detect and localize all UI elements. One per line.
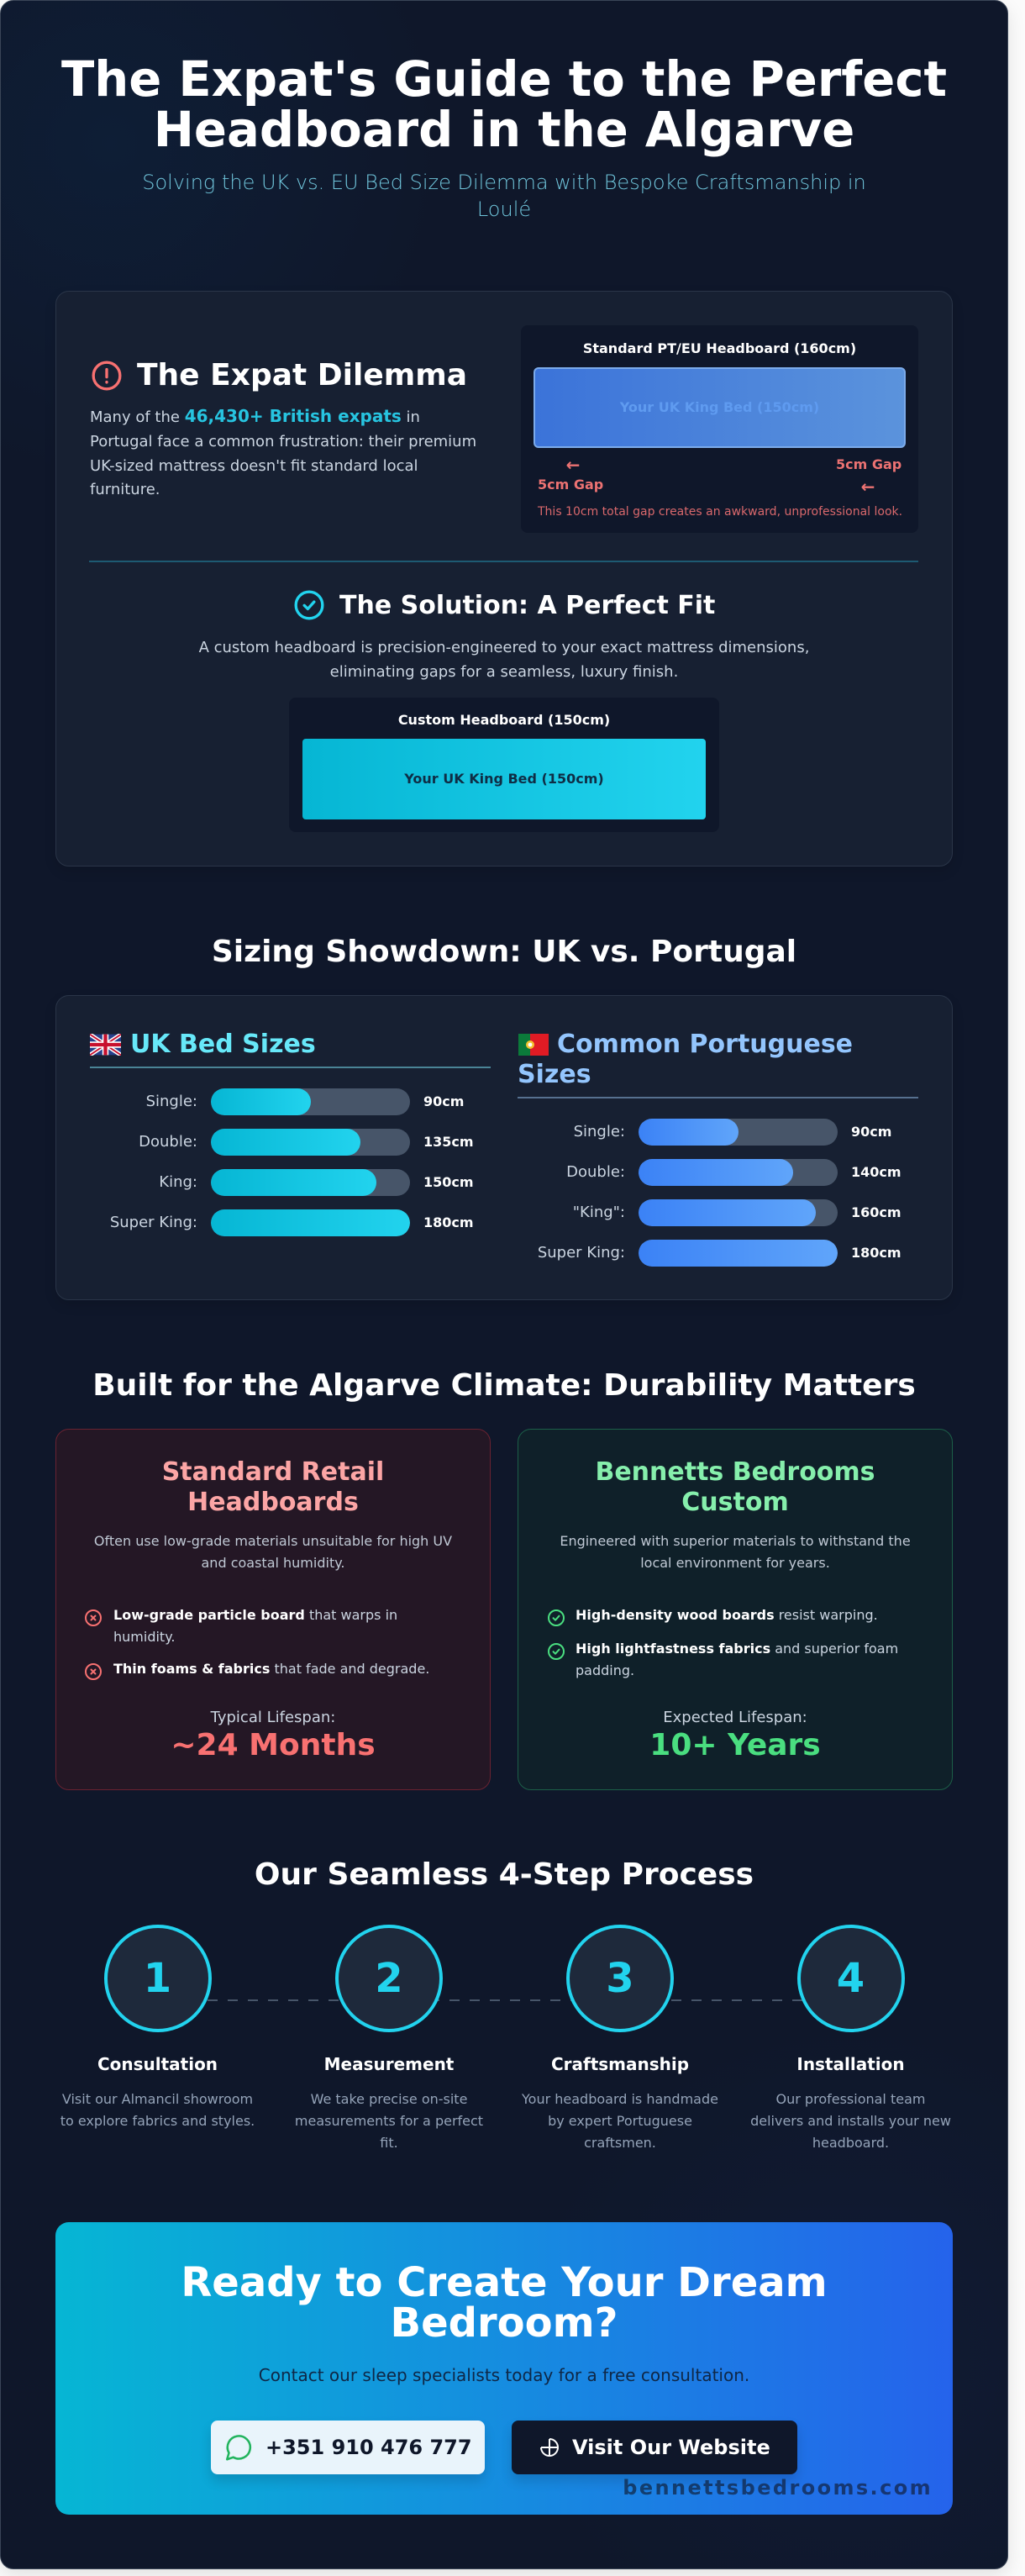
- panel: dilemma and solution: [55, 291, 953, 867]
- step description: [522, 2091, 718, 2151]
- heading: the expat dilemma: The Expat Dilemma: [137, 358, 467, 392]
- step number: 3: [606, 1955, 634, 2002]
- list item: Low-grade particle board that warps in: [113, 1607, 397, 1623]
- chart: UK sizes: [110, 1088, 474, 1236]
- chart: Portuguese sizes: [538, 1119, 901, 1267]
- list item: [576, 1641, 898, 1678]
- card description: Engineered with superior materials to withstand the: [560, 1533, 911, 1549]
- icon: alert circle: [92, 361, 121, 390]
- card description: local environment for years.: [640, 1555, 830, 1571]
- step description: We take precise on-site: [311, 2091, 467, 2107]
- text: solution description: [198, 639, 809, 681]
- list item: [113, 1607, 397, 1645]
- step description: headboard.: [812, 2135, 889, 2151]
- step description: Visit our Almancil showroom: [62, 2091, 253, 2107]
- card description: Often use low-grade materials unsuitable for high UV: [94, 1533, 452, 1549]
- step title: Craftsmanship: [551, 2054, 689, 2074]
- panel: Bennetts Bedrooms custom: [518, 1429, 953, 1790]
- title: [61, 51, 947, 158]
- infographic container: 150cm: [423, 1174, 474, 1190]
- step title: Consultation: [97, 2054, 218, 2074]
- subtitle: Loulé: [477, 198, 531, 221]
- card description: [94, 1533, 452, 1571]
- right gap label: 5cm Gap: [836, 456, 901, 472]
- divider: [89, 561, 918, 562]
- text: solution description: eliminating gaps for a seamless, luxury finish.: [330, 663, 678, 681]
- website label: Visit Our Website: [572, 2436, 770, 2459]
- card title: Headboards: [187, 1488, 359, 1517]
- list item: humidity.: [113, 1629, 175, 1645]
- step description: by expert Portuguese: [548, 2113, 692, 2129]
- button: phone: [211, 2421, 485, 2474]
- list item: Thin foams & fabrics that fade and degrade.: [113, 1661, 429, 1677]
- infographic container: 140cm: [851, 1164, 901, 1180]
- heading: common Portuguese sizes: Common Portuguese: [557, 1030, 853, 1059]
- title: The Expat's Guide to the Perfect: [61, 51, 947, 108]
- list item: High-density wood boards resist warping.: [576, 1607, 878, 1623]
- card description: [560, 1533, 911, 1571]
- heading: UK bed sizes: UK Bed Sizes: [130, 1030, 316, 1059]
- step description: craftsmen.: [584, 2135, 656, 2151]
- step 1: [60, 1925, 255, 2129]
- left gap arrow: ←: [566, 455, 580, 475]
- icon: UK flag: [90, 1034, 121, 1056]
- divider: [518, 1097, 918, 1098]
- step 3: [522, 1925, 718, 2151]
- step description: fit.: [380, 2135, 398, 2151]
- text: dilemma description: [90, 406, 476, 498]
- heading: the solution: The Solution: A Perfect Fit: [339, 591, 715, 620]
- infographic container: 90cm: [423, 1093, 464, 1109]
- title: Headboard in the Algarve: [154, 102, 854, 158]
- step title: Installation: [796, 2054, 905, 2074]
- step number: [335, 1925, 443, 2032]
- heading: durability: Built for the Algarve Climate: Durability Matters: [92, 1368, 916, 1403]
- CTA subtitle: Contact our sleep specialists today for a free consultation.: [259, 2365, 749, 2385]
- right gap arrow: ←: [861, 477, 875, 497]
- infographic container: 180cm: [851, 1245, 901, 1261]
- mattress bar: Your UK King Bed (150cm): [620, 399, 819, 415]
- subtitle: [142, 171, 866, 221]
- lifespan value: ~24 Months: [171, 1728, 376, 1762]
- lifespan label: Expected Lifespan:: [663, 1709, 807, 1726]
- step description: [750, 2091, 951, 2151]
- icon: Portugal flag: [518, 1034, 549, 1056]
- card title: Standard Retail: [162, 1457, 384, 1487]
- diagram: standard headboard gap: [521, 325, 918, 533]
- mattress bar: [302, 739, 706, 819]
- text: solution description: A custom headboard is precision-engineered to your exact mattress dimensions,: [199, 639, 809, 656]
- icon: cross: [85, 1609, 102, 1626]
- button: website: [512, 2421, 797, 2474]
- step number: 1: [144, 1955, 171, 2002]
- panel: sizing comparison: [55, 995, 953, 1300]
- panel: call to action: [55, 2222, 953, 2515]
- mattress bar: [534, 367, 906, 448]
- infographic container: 135cm: [423, 1134, 474, 1150]
- row: king: "King":: [573, 1204, 625, 1221]
- lifespan value: 10+ Years: [649, 1728, 821, 1762]
- text: dilemma description: furniture.: [90, 481, 160, 498]
- infographic container: 90cm: [851, 1124, 891, 1140]
- step 4: [750, 1925, 951, 2151]
- left gap label: 5cm Gap: [538, 477, 603, 493]
- lifespan label: Typical Lifespan:: [211, 1709, 335, 1726]
- CTA title: Bedroom?: [390, 2299, 618, 2347]
- step description: Our professional team: [776, 2091, 925, 2107]
- infographic container: 160cm: [851, 1204, 901, 1220]
- step description: to explore fabrics and styles.: [60, 2113, 255, 2129]
- step number: 4: [837, 1955, 865, 2002]
- website watermark: bennettsbedrooms.com: [623, 2476, 933, 2500]
- CTA title: Ready to Create Your Dream: [181, 2259, 828, 2306]
- list item: High lightfastness fabrics and superior foam: [576, 1641, 898, 1657]
- card description: and coastal humidity.: [202, 1555, 344, 1571]
- panel: standard retail headboards: [55, 1429, 491, 1790]
- mattress bar: Your UK King Bed (150cm): [404, 771, 604, 787]
- subtitle: Solving the UK vs. EU Bed Size Dilemma with Bespoke Craftsmanship in: [142, 171, 866, 194]
- step description: Your headboard is handmade: [522, 2091, 718, 2107]
- step 2: [295, 1925, 483, 2151]
- infographic container: 180cm: [423, 1214, 474, 1230]
- row: king: King:: [159, 1173, 197, 1191]
- list item: padding.: [576, 1662, 634, 1678]
- diagram: custom headboard: [289, 698, 719, 832]
- step number: [104, 1925, 212, 2032]
- heading: common Portuguese sizes: Sizes: [518, 1060, 591, 1089]
- step description: delivers and installs your new: [750, 2113, 951, 2129]
- card title: Bennetts Bedrooms: [595, 1457, 875, 1487]
- text: dilemma description: Portugal face a common frustration: their premium: [90, 433, 476, 450]
- card title: [162, 1457, 384, 1517]
- connector: dashed line: [208, 1999, 802, 2001]
- step number: [796, 1925, 904, 2032]
- step title: Measurement: [324, 2054, 454, 2074]
- step number: 2: [375, 1955, 403, 2002]
- row: super king: Super King:: [538, 1244, 625, 1262]
- row: double: Double:: [566, 1163, 625, 1181]
- icon: cross: [85, 1663, 102, 1680]
- card title: [595, 1457, 875, 1517]
- step number: [566, 1925, 674, 2032]
- card title: Custom: [681, 1488, 789, 1517]
- icon: check: [548, 1643, 565, 1660]
- row: double: Double:: [139, 1133, 197, 1151]
- heading: sizing showdown: Sizing Showdown: UK vs. Portugal: [212, 935, 796, 969]
- step description: [60, 2091, 255, 2129]
- step description: measurements for a perfect: [295, 2113, 483, 2129]
- icon: check circle: [294, 590, 324, 620]
- text: dilemma description: Many of the 46,430+ British expats in: [90, 406, 420, 426]
- step description: [295, 2091, 483, 2151]
- CTA title: [181, 2259, 828, 2347]
- row: single: Single:: [146, 1093, 197, 1110]
- diagram label: Custom Headboard (150cm): [398, 712, 610, 728]
- row: super king: Super King:: [110, 1214, 197, 1231]
- text: dilemma description: UK-sized mattress doesn't fit standard local: [90, 457, 418, 475]
- divider: [90, 1067, 491, 1068]
- phone number: +351 910 476 777: [265, 2436, 472, 2459]
- icon: globe: [540, 2438, 559, 2457]
- icon: chat bubble: [225, 2435, 252, 2461]
- heading: common Portuguese sizes: [518, 1030, 853, 1089]
- diagram label: Standard PT/EU Headboard (160cm): [583, 340, 856, 356]
- row: single: Single:: [574, 1123, 625, 1140]
- heading: process: Our Seamless 4-Step Process: [255, 1857, 754, 1892]
- gap caption: This 10cm total gap creates an awkward, unprofessional look.: [538, 505, 902, 519]
- icon: check: [548, 1609, 565, 1626]
